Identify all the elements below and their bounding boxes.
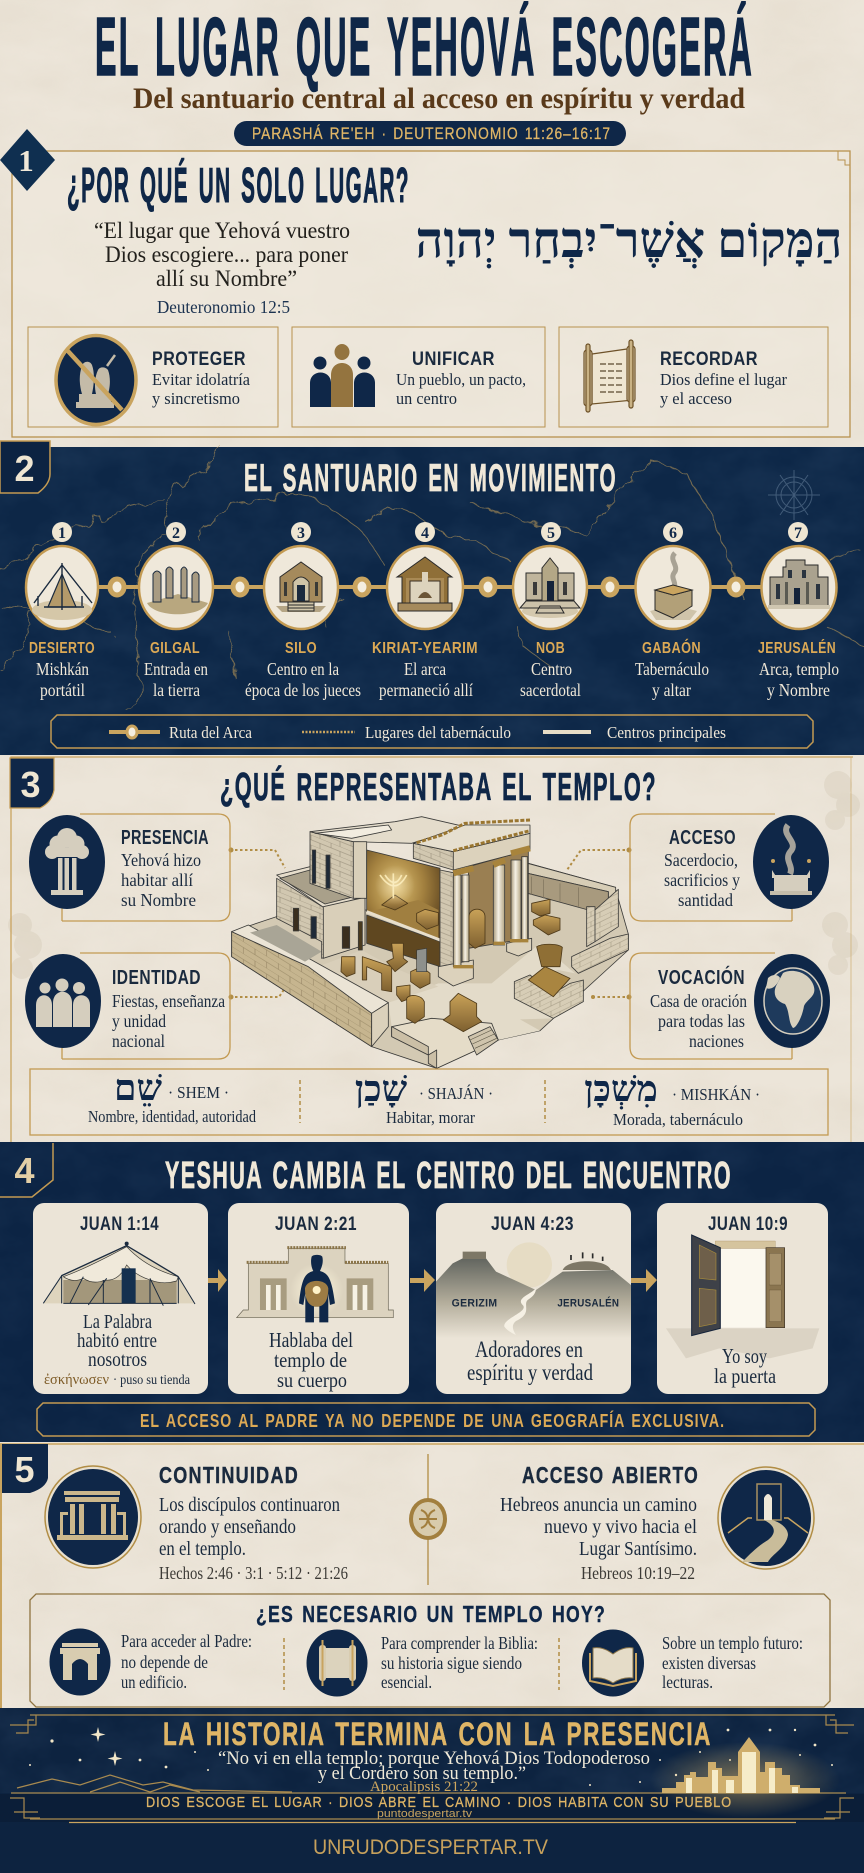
- stop 5: nob: NOB: [536, 640, 565, 657]
- card text: [77, 1311, 157, 1371]
- callout: acceso: [630, 814, 829, 921]
- card: proteger: [28, 327, 278, 427]
- item: templo futuro: [582, 1630, 803, 1696]
- card text: su cuerpo: [277, 1368, 347, 1392]
- callout text: [650, 965, 747, 1051]
- stop 6: gabaón: Tabernáculo: [635, 659, 709, 679]
- icon: open book: [582, 1630, 644, 1696]
- card text: nosotros: [88, 1349, 147, 1371]
- stop 4: kiriat-yearim: permaneció allí: [379, 680, 473, 700]
- callout text: VOCACIÓN: [658, 965, 745, 989]
- basin platform: [514, 975, 583, 1018]
- legend: Lugares del tabernáculo: [365, 723, 511, 742]
- callout text: Fiestas, enseñanza: [112, 991, 225, 1011]
- panel 4: yeshua cambia el centro: [0, 1142, 864, 1442]
- item: acceder al padre: un edificio.: [121, 1672, 187, 1692]
- callout: presencia: [29, 814, 230, 921]
- inner bay: [468, 850, 528, 948]
- label: [660, 349, 787, 408]
- panel 3: qué representaba el templo: [8, 757, 860, 1142]
- card text: Yo soy: [722, 1344, 767, 1368]
- icon: scroll: [584, 340, 635, 412]
- stop 1: desierto: Mishkán: [36, 659, 89, 679]
- item: acceder al padre: no depende de: [121, 1652, 208, 1672]
- greek word: ἐσκήνωσεν: [44, 1372, 109, 1388]
- block text: Hebreos anuncia un camino: [500, 1494, 697, 1516]
- upper left block: [310, 832, 353, 898]
- panel heading: ¿ES NECESARIO UN TEMPLO HOY?: [256, 1601, 606, 1627]
- label: [152, 349, 250, 408]
- route line: [98, 579, 763, 595]
- panel: la historia termina con la presencia: [0, 1708, 864, 1873]
- callout text: sacrificios y: [664, 870, 740, 890]
- stop 5: nob: [513, 522, 587, 700]
- term: mishkán: מִשְׁכָּן: [584, 1069, 658, 1110]
- term: mishkán: [584, 1069, 760, 1129]
- stop 4: kiriat-yearim: El arca: [404, 659, 446, 679]
- greek word: · puso su tienda: [113, 1373, 191, 1388]
- section number badge: 5: [14, 1449, 36, 1490]
- callout text: [112, 967, 225, 1051]
- arrows: [208, 1269, 657, 1292]
- stop 1: desierto: [26, 522, 98, 700]
- icon: scroll: [306, 1630, 368, 1696]
- stop 3: silo: [245, 522, 361, 700]
- item: templo futuro: Sobre un templo futuro:: [662, 1633, 803, 1653]
- callout text: Sacerdocio,: [664, 850, 738, 870]
- term: shem: שֵׁם: [114, 1068, 162, 1108]
- outer left wall: [232, 932, 372, 1047]
- block: acceso abierto: [500, 1462, 814, 1583]
- card: unificar: [292, 327, 545, 427]
- stop 7: jerusalén: [758, 522, 839, 700]
- label: y sincretismo: [152, 389, 240, 408]
- label: UNIFICAR: [412, 349, 495, 370]
- block text: ACCESO ABIERTO: [522, 1462, 699, 1488]
- parasha pill: [234, 121, 626, 146]
- ornamental frame: [10, 1715, 854, 1819]
- term: shem: [88, 1068, 256, 1126]
- stop 1: desierto: DESIERTO: [29, 640, 95, 657]
- quote reference: Deuteronomio 12:5: [157, 297, 290, 317]
- item: acceder al padre: [50, 1628, 252, 1696]
- term: shem: · SHEM ·: [168, 1083, 229, 1102]
- label: Un pueblo, un pacto,: [396, 370, 526, 389]
- card text: [714, 1344, 777, 1388]
- quote: [94, 218, 350, 291]
- callout text: naciones: [689, 1031, 744, 1051]
- section number badge: [2, 1444, 48, 1493]
- header: [95, 0, 754, 146]
- stop 6: gabaón: GABAÓN: [642, 638, 701, 657]
- callout text: para todas las: [658, 1011, 745, 1031]
- card: juan 4:23: [436, 1203, 631, 1394]
- item: comprender la biblia: [306, 1630, 538, 1696]
- icon: two mountains: JERUSALÉN: [557, 1297, 619, 1310]
- parasha pill: PARASHÁ RE'EH · DEUTERONOMIO 11:26–16:17: [252, 124, 611, 143]
- term: shaján: שָׁכַן: [355, 1069, 408, 1109]
- term: shaján: · SHAJÁN ·: [419, 1084, 493, 1103]
- callout text: [121, 827, 209, 910]
- card: juan 2:21: JUAN 2:21: [275, 1214, 357, 1235]
- callout: identidad: [25, 953, 230, 1059]
- panel: es necesario un templo hoy: [30, 1594, 830, 1707]
- label: y el acceso: [660, 389, 732, 408]
- label: un centro: [396, 389, 457, 408]
- item: templo futuro: lecturas.: [662, 1672, 713, 1692]
- stop 7: jerusalén: y Nombre: [767, 680, 830, 700]
- icon: two mountains: GERIZIM: [452, 1298, 497, 1310]
- quote: Dios escogiere... para poner: [105, 242, 348, 267]
- callout text: PRESENCIA: [121, 827, 209, 849]
- icon: temple facade: [45, 1466, 141, 1568]
- stop 7: jerusalén: JERUSALÉN: [758, 638, 836, 657]
- icon: cloud over columns: [29, 815, 105, 909]
- term: mishkán: · MISHKÁN ·: [672, 1085, 760, 1104]
- block text: [159, 1462, 348, 1583]
- far right wall: [528, 863, 616, 943]
- stop 2: gilgal: GILGAL: [150, 640, 200, 657]
- small site credit: puntodespertar.tv: [377, 1808, 473, 1820]
- callout: vocación: [630, 953, 830, 1059]
- panel 5: continuidad y acceso abierto: [0, 1444, 864, 1708]
- stars: [29, 1727, 833, 1786]
- callout text: ACCESO: [669, 827, 736, 849]
- icon: community: [25, 954, 101, 1048]
- callout text: y unidad: [112, 1011, 166, 1031]
- icon: forbidden idol: [56, 336, 136, 424]
- item: acceder al padre: Para acceder al Padre:: [121, 1631, 252, 1651]
- temple furnishings: [341, 895, 560, 1032]
- quote: allí su Nombre”: [156, 266, 297, 291]
- columns: [453, 857, 528, 967]
- footer rule: [69, 1822, 796, 1824]
- card text: Hablaba del: [269, 1328, 353, 1352]
- stop 6: gabaón: 6: [669, 525, 677, 542]
- card text: templo de: [274, 1348, 347, 1372]
- card: recordar: [559, 327, 828, 427]
- courts floor: [232, 863, 628, 1068]
- left lower building: [277, 878, 365, 958]
- stop 4: kiriat-yearim: 4: [421, 525, 429, 542]
- quote: “El lugar que Yehová vuestro: [94, 218, 350, 243]
- card: juan 1:14: JUAN 1:14: [80, 1214, 159, 1235]
- footer brand: UNRUDODESPERTAR.TV: [313, 1836, 548, 1859]
- closing quote: [218, 1748, 650, 1784]
- stop 5: nob: 5: [547, 525, 555, 542]
- block text: Lugar Santísimo.: [579, 1538, 697, 1560]
- card: juan 2:21: [228, 1203, 409, 1394]
- item: comprender la biblia: esencial.: [381, 1672, 432, 1692]
- stop 2: gilgal: Entrada en: [144, 659, 208, 679]
- divider with medallion: [409, 1454, 447, 1585]
- stop 2: gilgal: 2: [172, 525, 180, 542]
- stop 7: jerusalén: Arca, templo: [759, 659, 839, 679]
- card text: la puerta: [714, 1364, 777, 1388]
- icon: compass rose: [768, 470, 820, 520]
- card text: Adoradores en: [475, 1337, 583, 1362]
- statement banner: [37, 1403, 815, 1436]
- closing quote: y el Cordero son su templo.”: [318, 1763, 526, 1784]
- greek word: [44, 1372, 191, 1388]
- mountains line art: [17, 1775, 292, 1792]
- illustration: temple cutaway: [232, 817, 628, 1068]
- interior cutaway: [367, 850, 440, 942]
- stop 4: kiriat-yearim: [372, 522, 478, 700]
- item: comprender la biblia: su historia sigue siendo: [381, 1653, 522, 1673]
- block text: Los discípulos continuaron: [159, 1494, 340, 1516]
- hebrew terms band: [30, 1068, 828, 1135]
- section number badge: [0, 1143, 53, 1197]
- section number badge: 2: [14, 448, 36, 489]
- callout text: Yehová hizo: [121, 850, 201, 870]
- golden city: [650, 1737, 840, 1818]
- stop 2: gilgal: la tierra: [153, 680, 200, 700]
- block text: en el templo.: [159, 1538, 246, 1560]
- icon: two mountains: [436, 1242, 631, 1338]
- closing motto: DIOS ESCOGE EL LUGAR · DIOS ABRE EL CAMINO · DIOS HABITA CON SU PUEBLO: [146, 1794, 732, 1811]
- pier: [440, 870, 453, 983]
- card text: [269, 1328, 353, 1392]
- closing quote: “No vi en ella templo; porque Yehová Dios Todopoderoso: [218, 1748, 650, 1769]
- stop 1: desierto: 1: [58, 525, 66, 542]
- stop 3: silo: SILO: [285, 640, 317, 657]
- icon: globe: [754, 954, 830, 1048]
- section number badge: [10, 758, 54, 808]
- icon: three people: [310, 344, 375, 407]
- stop 7: jerusalén: 7: [794, 525, 802, 542]
- dotted connectors: [228, 848, 632, 1000]
- callout text: habitar allí: [121, 870, 193, 890]
- label: RECORDAR: [660, 349, 758, 370]
- card text: La Palabra: [83, 1311, 152, 1333]
- card: juan 10:9: JUAN 10:9: [708, 1214, 788, 1235]
- card text: habitó entre: [77, 1330, 157, 1352]
- stop 1: desierto: portátil: [40, 680, 85, 700]
- item: templo futuro: existen diversas: [662, 1653, 756, 1673]
- label: PROTEGER: [152, 349, 246, 370]
- subtitle: Del santuario central al acceso en espíritu y verdad: [133, 82, 745, 115]
- icon: tent: [43, 1242, 195, 1306]
- stop 2: gilgal: [139, 522, 213, 700]
- item: comprender la biblia: Para comprender la Biblia:: [381, 1633, 538, 1653]
- term: mishkán: Morada, tabernáculo: [613, 1110, 743, 1129]
- stop 3: silo: 3: [297, 525, 305, 542]
- stop 5: nob: sacerdotal: [520, 680, 581, 700]
- block text: nuevo y vivo hacia el: [544, 1516, 697, 1538]
- block: continuidad: [45, 1462, 348, 1583]
- icon: altar with smoke: [753, 815, 829, 909]
- block text: Hebreos 10:19–22: [581, 1563, 695, 1583]
- callout text: su Nombre: [121, 890, 196, 910]
- card: juan 1:14: [33, 1203, 208, 1394]
- label: Evitar idolatría: [152, 370, 250, 389]
- statement banner: EL ACCESO AL PADRE YA NO DEPENDE DE UNA GEOGRAFÍA EXCLUSIVA.: [140, 1410, 725, 1431]
- callout text: [664, 827, 740, 910]
- card: juan 10:9: [657, 1203, 828, 1394]
- block text: Hechos 2:46 · 3:1 · 5:12 · 21:26: [159, 1563, 348, 1583]
- section number diamond: 1: [18, 143, 34, 178]
- block text: [500, 1462, 699, 1583]
- block text: orando y enseñando: [159, 1516, 296, 1538]
- stop 6: gabaón: [635, 522, 710, 700]
- section number badge: 4: [14, 1150, 36, 1191]
- card text: [467, 1337, 593, 1385]
- icon: temple and body: [237, 1248, 393, 1322]
- stop 5: nob: Centro: [531, 659, 572, 679]
- front steps: [392, 1018, 498, 1068]
- callout text: IDENTIDAD: [112, 967, 201, 989]
- legend: [51, 715, 813, 748]
- stop 4: kiriat-yearim: KIRIAT-YEARIM: [372, 640, 478, 657]
- icon: path to open door: [718, 1467, 814, 1569]
- callout text: nacional: [112, 1031, 165, 1051]
- callout text: santidad: [678, 890, 733, 910]
- entablature: [413, 843, 453, 870]
- icon: arch: [50, 1628, 110, 1696]
- legend: Centros principales: [607, 723, 726, 742]
- term: shaján: [355, 1069, 493, 1127]
- panel 2: santuario en movimiento: [0, 441, 864, 755]
- hebrew phrase: הַמָּקוֹם אֲשֶׁר־יִבְחַר יְהוָה: [416, 212, 842, 269]
- panel 1: por qué un solo lugar: [0, 129, 850, 437]
- block text: CONTINUIDAD: [159, 1462, 299, 1488]
- term: shem: Nombre, identidad, autoridad: [88, 1107, 256, 1126]
- section number badge: 3: [20, 764, 42, 805]
- callout text: Casa de oración: [650, 991, 747, 1011]
- legend: Ruta del Arca: [169, 723, 252, 742]
- label: [396, 349, 526, 408]
- section number diamond: [0, 129, 55, 191]
- stop 3: silo: época de los jueces: [245, 680, 361, 700]
- stop 3: silo: Centro en la: [267, 659, 339, 679]
- label: Dios define el lugar: [660, 370, 787, 389]
- card: juan 4:23: JUAN 4:23: [491, 1214, 574, 1235]
- stop 6: gabaón: y altar: [652, 680, 691, 700]
- term: shaján: Habitar, morar: [386, 1108, 475, 1127]
- section number badge: [0, 441, 50, 493]
- panel 1: por qué un solo lugar: ¿POR QUÉ UN SOLO LUGAR?: [67, 159, 410, 213]
- card text: espíritu y verdad: [467, 1360, 593, 1385]
- icon: open door: [666, 1235, 819, 1358]
- quote reference: Apocalipsis 21:22: [370, 1779, 478, 1795]
